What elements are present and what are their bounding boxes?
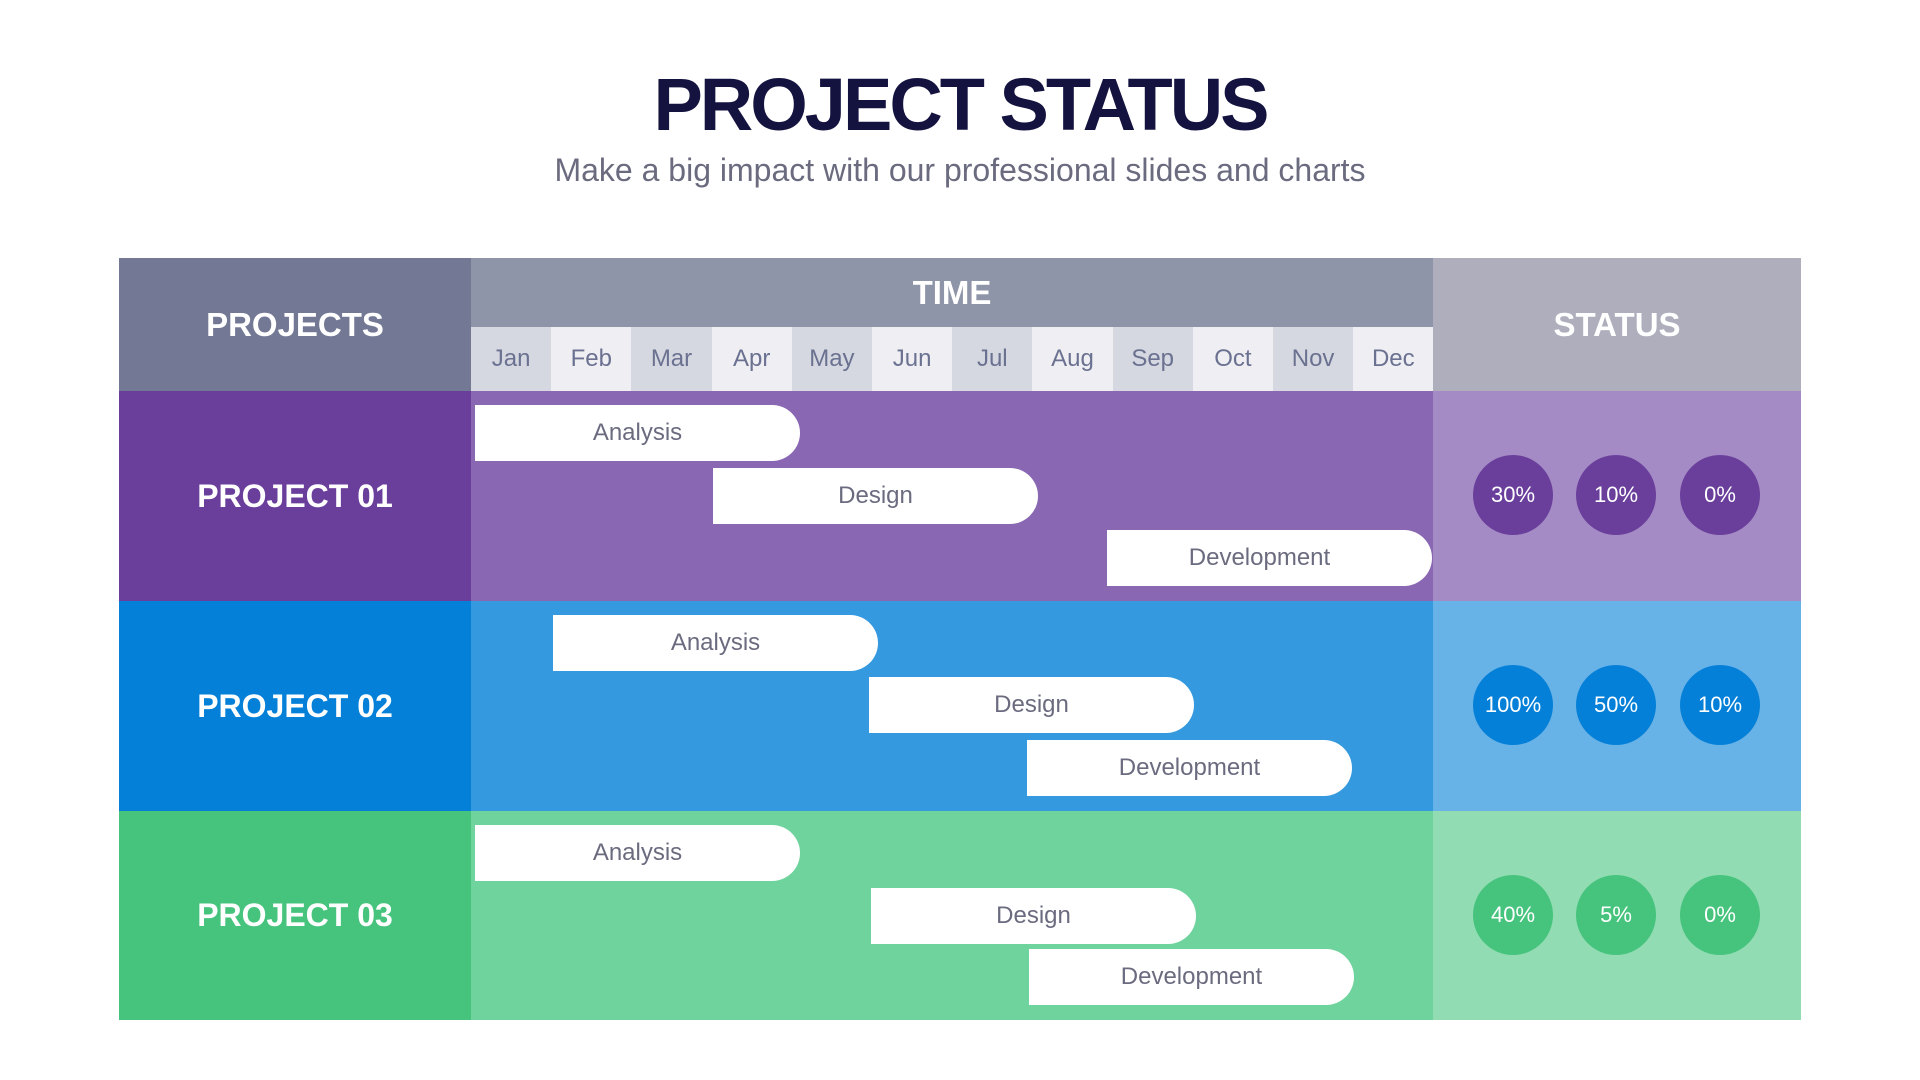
bars project 02 xyxy=(553,615,1352,796)
status circles project 03: 40% xyxy=(1491,902,1535,927)
header: time: TIME xyxy=(913,274,991,310)
months row: Nov xyxy=(1292,345,1334,372)
status circles project 03: 5% xyxy=(1600,902,1632,927)
months row: Oct xyxy=(1214,345,1252,372)
bars project 01: Analysis xyxy=(593,419,682,446)
status circles project 02 xyxy=(1473,665,1760,745)
months row: Jan xyxy=(492,345,530,372)
status circles project 02: 100% xyxy=(1485,692,1541,717)
months row: May xyxy=(809,345,855,372)
months row: Feb xyxy=(571,345,612,372)
months row: Aug xyxy=(1051,345,1094,372)
bars project 03: Design xyxy=(996,902,1071,929)
header: status xyxy=(1433,258,1801,391)
status circles project 01: 30% xyxy=(1491,482,1535,507)
months row: Sep xyxy=(1131,345,1174,372)
label: project 01: PROJECT 01 xyxy=(197,478,393,514)
status circles project 01 xyxy=(1473,455,1760,535)
status circles project 03 xyxy=(1473,875,1760,955)
header: projects xyxy=(119,258,471,391)
label: project 03: PROJECT 03 xyxy=(197,897,393,933)
months row: Dec xyxy=(1372,345,1415,372)
bars project 03: Development xyxy=(1121,963,1262,990)
months row: Jul xyxy=(977,345,1008,372)
bars project 02: Development xyxy=(1119,754,1260,781)
table xyxy=(119,258,1801,1020)
header: status: STATUS xyxy=(1553,306,1681,342)
bars project 02: Analysis xyxy=(671,629,760,656)
bars project 02: Design xyxy=(994,691,1069,718)
title: PROJECT STATUS xyxy=(653,62,1267,146)
status circles project 02: 10% xyxy=(1698,692,1742,717)
months row: Jun xyxy=(893,345,931,372)
status circles project 02: 50% xyxy=(1594,692,1638,717)
bars project 01 xyxy=(475,405,1432,586)
header: time xyxy=(471,258,1433,327)
bars project 03: Analysis xyxy=(593,839,682,866)
bars project 03 xyxy=(475,825,1354,1005)
bars project 01: Design xyxy=(838,482,913,509)
row backgrounds xyxy=(119,391,1801,1020)
subtitle: Make a big impact with our professional slides and charts xyxy=(554,152,1366,188)
label: project 02: PROJECT 02 xyxy=(197,688,393,724)
status circles project 03: 0% xyxy=(1704,902,1736,927)
header: projects: PROJECTS xyxy=(206,306,384,342)
bars project 01: Development xyxy=(1189,544,1330,571)
months row: Apr xyxy=(733,345,770,372)
months row: Mar xyxy=(651,345,692,372)
status circles project 01: 0% xyxy=(1704,482,1736,507)
status circles project 01: 10% xyxy=(1594,482,1638,507)
